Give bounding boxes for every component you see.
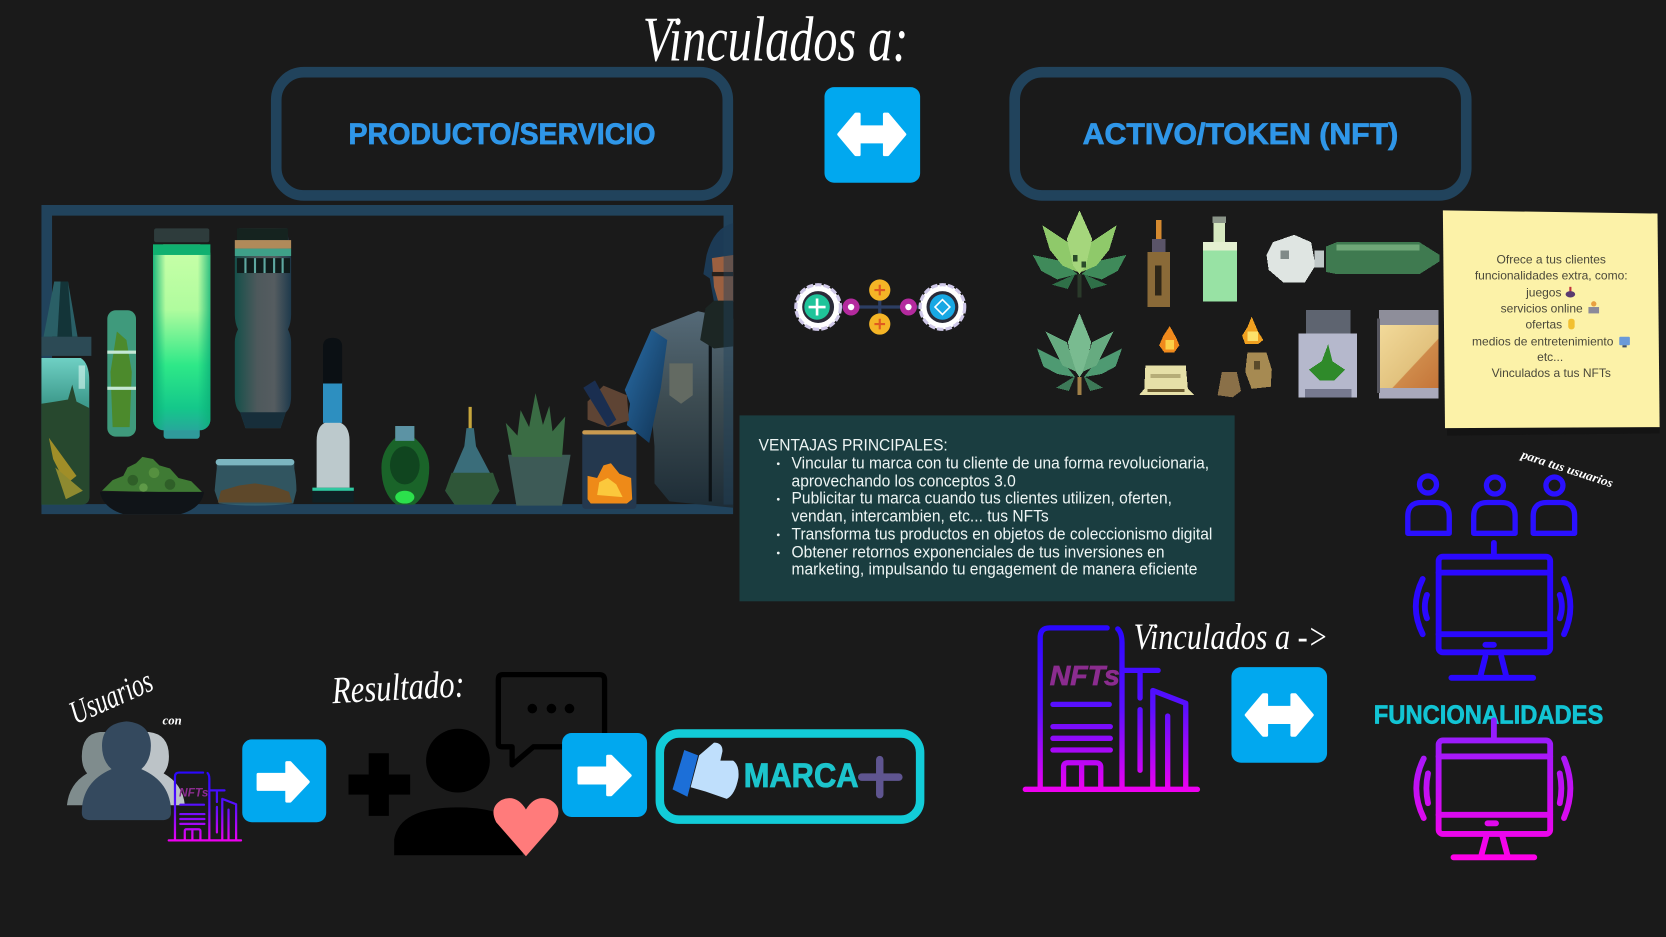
- logo: marca plus: [660, 734, 920, 820]
- icon: person: [394, 729, 523, 855]
- bullet list: marketing, impulsando tu engagement de manera eficiente: [792, 561, 1197, 579]
- token chain icon: [796, 279, 965, 335]
- panel: activo/token: [1015, 72, 1466, 195]
- title: Vinculados a:: [643, 4, 908, 75]
- left link: [843, 299, 860, 316]
- label: vinculados a: Vinculados a ->: [1134, 617, 1328, 658]
- back user right: [128, 732, 185, 805]
- heading: activo/token: ACTIVO/TOKEN (NFT): [1083, 118, 1398, 151]
- label: NFTs: NFTs: [1050, 660, 1120, 691]
- triangular flask: [445, 407, 499, 505]
- label: NFTs small: NFTs: [179, 787, 209, 800]
- double arrow button: bottom: [1231, 667, 1327, 763]
- shelf frame: [41, 205, 733, 514]
- heading: ventajas: VENTAJAS PRINCIPALES:: [759, 436, 948, 454]
- emoji: person at laptop: [1588, 301, 1599, 313]
- left token: [796, 285, 840, 329]
- bullet list: aprovechando los conceptos 3.0: [792, 473, 1016, 491]
- panel: ventajas principales: [740, 415, 1235, 601]
- potted plant: [506, 393, 571, 506]
- glowing glass with flames: [582, 430, 636, 509]
- bullet list: Transforma tus productos en objetos de coleccionismo digital: [792, 526, 1212, 544]
- heading: producto/servicio: PRODUCTO/SERVICIO: [348, 118, 656, 151]
- sticky note text: medios de entretenimiento: [1472, 334, 1614, 348]
- double arrow button: top: [824, 87, 920, 183]
- label: para tus usuarios: para tus usuarios: [1519, 447, 1615, 490]
- back user left: [67, 732, 117, 805]
- sticky note text: [1472, 252, 1628, 380]
- right arrow button: first: [242, 739, 326, 822]
- right link: [900, 299, 917, 316]
- pixel drink can: [1377, 310, 1439, 398]
- icon: user group: [67, 721, 185, 820]
- label: funcionalidades: FUNCIONALIDADES: [1374, 701, 1603, 729]
- icon: heart: [493, 798, 558, 856]
- sticky note text: juegos: [1525, 285, 1562, 299]
- panel: producto/servicio: [276, 72, 728, 195]
- sticky note text: Vinculados a tus NFTs: [1492, 366, 1611, 380]
- icon: monitor blue: [1416, 543, 1570, 678]
- sticky note text: Ofrece a tus clientes: [1497, 252, 1606, 266]
- pixel torch: [1148, 220, 1170, 307]
- tall glowing tube: [153, 228, 210, 439]
- icon: plus symbol: [862, 760, 899, 795]
- man with sprayer: [583, 216, 733, 508]
- dark metal cylinder: [235, 228, 291, 428]
- bullet list: Obtener retornos exponenciales de tus inversiones en: [792, 544, 1164, 562]
- bowl of herbs: [100, 457, 204, 514]
- label: con: con: [163, 714, 182, 728]
- pixel herb jar: [1298, 310, 1357, 397]
- icon: speech bubble: [498, 675, 605, 765]
- pixel bottle: [1203, 217, 1237, 302]
- pixel candle flame: [1139, 326, 1194, 395]
- sticky note text: servicios online: [1501, 301, 1583, 315]
- label: usuarios: Usuarios: [64, 664, 158, 732]
- icon: plus: [348, 753, 410, 816]
- label: resultado: Resultado:: [330, 663, 466, 712]
- right token: [920, 285, 965, 329]
- bullet list: [777, 455, 1212, 579]
- bullet list: Publicitar tu marca cuando tus clientes utilizen, oferten,: [792, 490, 1172, 508]
- icon: NFT building small: [169, 773, 241, 840]
- small tube with herb: [107, 310, 136, 437]
- top node: [869, 279, 890, 301]
- product shelf image: [41, 205, 733, 514]
- emoji: joystick: [1566, 287, 1575, 297]
- pixel leaf: muted: [1037, 313, 1122, 395]
- connectors: [839, 287, 922, 329]
- bullet list: Vincular tu marca con tu cliente de una forma revolucionaria,: [792, 455, 1209, 472]
- front user: [82, 721, 171, 820]
- bullet list: vendan, intercambien, etc... tus NFTs: [792, 508, 1049, 526]
- glass jar with seeds: [215, 459, 296, 506]
- pixel spray can: [1266, 235, 1440, 283]
- white capsule tube: [312, 338, 354, 502]
- emoji: hand: [1568, 319, 1575, 329]
- icon: thumbs up: [673, 743, 739, 799]
- pixel flame and rocks: [1218, 317, 1272, 397]
- green flask: [381, 426, 429, 505]
- right arrow button: second: [562, 733, 647, 817]
- bottom node: [869, 313, 890, 335]
- icon: monitor magenta: [1416, 720, 1570, 857]
- emoji: television: [1619, 337, 1630, 347]
- icon: users: [1408, 476, 1575, 533]
- sticky note text: funcionalidades extra, como:: [1475, 268, 1628, 282]
- sticky note text: ofertas: [1525, 317, 1562, 331]
- sticky note: [1443, 210, 1660, 436]
- text: MARCA: MARCA: [744, 757, 859, 795]
- pixel leaf: light: [1033, 210, 1126, 297]
- bottle with plant: [41, 282, 91, 505]
- icon: NFT building large: [1025, 628, 1197, 789]
- pixel art NFT collection: [1033, 210, 1440, 398]
- sticky note text: etc...: [1537, 350, 1563, 364]
